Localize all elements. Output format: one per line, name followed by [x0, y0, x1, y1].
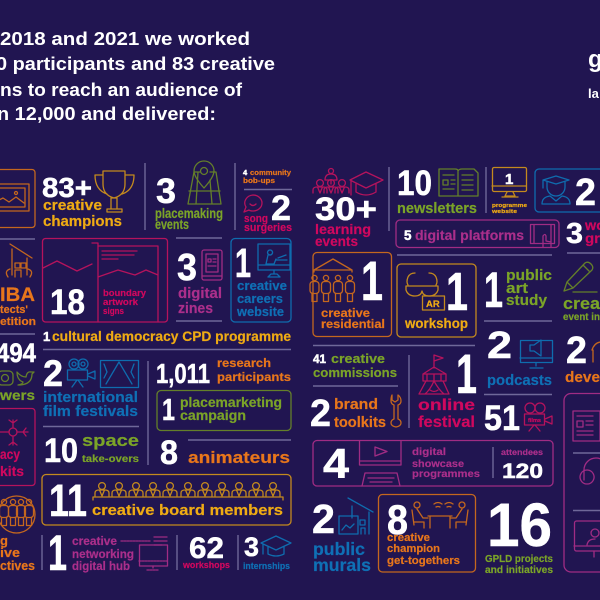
- panel: creative board members: 11: [49, 475, 87, 526]
- RIBA architects competition: [0, 285, 36, 328]
- panel: creative champion get-togethers: 8: [387, 496, 408, 543]
- panel: AR workshop: 1: [446, 262, 468, 322]
- animateurs: [160, 434, 290, 472]
- creative collectives: g: [0, 533, 8, 548]
- panel: creative board members: [42, 474, 291, 526]
- brand toolkits: [310, 393, 401, 435]
- song surgeries: 2: [271, 189, 291, 228]
- panel: digital platforms: [396, 220, 559, 248]
- creative networking digital hub: networking: [72, 547, 134, 561]
- panel: placemarketing campaign: placemarketing: [180, 395, 282, 410]
- international film festivals: 2: [43, 353, 63, 394]
- panel: creative residential: 1: [361, 249, 383, 312]
- panel: digital showcase programmes: [313, 440, 553, 487]
- newsletters: [397, 164, 478, 217]
- public art study: public: [506, 268, 552, 284]
- title: intro statement: n 12,000 and delivered:: [0, 103, 216, 124]
- song surgeries: [244, 189, 292, 234]
- panel: creative careers website: careers: [237, 291, 283, 306]
- title: intro statement: ns to reach an audience of: [0, 79, 243, 100]
- international film festivals: film festivals: [43, 403, 138, 420]
- title: intro statement: 2018 and 2021 we worked: [0, 28, 250, 49]
- placemaking events: 3: [156, 172, 176, 211]
- panel: graduate: 2: [575, 172, 596, 214]
- GPLD projects and initiatives: GPLD projects: [485, 553, 553, 565]
- creative commissions: [313, 352, 397, 380]
- panel: democracy toolkits: acy: [0, 446, 20, 462]
- cultural democracy CPD programme: cultural democracy CPD programme: [52, 329, 291, 344]
- panel: digital showcase programmes: attendees: [501, 447, 543, 457]
- icon: house: [6, 244, 32, 277]
- podcasts: 2: [487, 325, 512, 367]
- creative networking digital hub: 1: [48, 525, 67, 581]
- digital zines: 3: [177, 247, 197, 289]
- community bob-ups: bob-ups: [243, 176, 275, 185]
- panel: creative residential: creative: [321, 306, 370, 320]
- GPLD projects and initiatives: and initiatives: [485, 564, 553, 576]
- online festival: festival: [418, 414, 475, 431]
- panel: creative careers website: creative: [237, 278, 287, 293]
- public murals: [312, 496, 373, 575]
- RIBA architects competition: etition: [0, 316, 36, 328]
- creative event: event in: [563, 312, 600, 323]
- creative champions: champions: [43, 213, 122, 230]
- international film festivals: [43, 353, 138, 420]
- internships: [243, 532, 291, 571]
- animateurs: 8: [160, 434, 178, 472]
- panel: right resources: [564, 394, 600, 572]
- community bob-ups: [243, 168, 292, 185]
- creative event: crea: [563, 295, 600, 313]
- panel: boundary artwork signs: signs: [103, 306, 124, 317]
- placemaking events: events: [155, 217, 189, 232]
- workshops: 62: [189, 532, 224, 565]
- song surgeries: surgeries: [244, 222, 292, 234]
- space take-overs: take-overs: [82, 454, 139, 465]
- online festival: online: [418, 397, 475, 414]
- public murals: murals: [313, 555, 371, 575]
- public art study: [484, 262, 552, 318]
- panel: placemarketing campaign: [157, 390, 291, 430]
- RIBA architects competition: IBA: [0, 285, 35, 306]
- panel: picture icon box: [0, 170, 35, 228]
- workshop groups: [566, 217, 600, 250]
- learning events: [313, 168, 383, 249]
- panel: digital showcase programmes: programmes: [412, 468, 480, 480]
- online festival: 1: [456, 342, 477, 405]
- brand toolkits: toolkits: [334, 414, 386, 431]
- space take-overs: [44, 432, 139, 470]
- public art study: 1: [484, 262, 503, 318]
- panel: creative champion get-togethers: get-togethers: [387, 555, 460, 567]
- public murals: public: [313, 539, 365, 559]
- cultural democracy CPD programme: 1: [43, 329, 50, 344]
- learning events: learning: [315, 221, 371, 237]
- workshops: [182, 532, 230, 571]
- panel: digital showcase programmes: digital: [412, 446, 446, 458]
- developers: [565, 330, 600, 386]
- animateurs: animateurs: [188, 449, 290, 467]
- social followers: wers: [0, 388, 35, 403]
- creative networking digital hub: [48, 525, 168, 581]
- developers: 2: [566, 330, 587, 372]
- learning events: events: [315, 233, 358, 249]
- panel: boundary artwork signs: boundary: [103, 288, 147, 299]
- creative networking digital hub: creative: [72, 534, 117, 548]
- panel: creative residential: [310, 249, 392, 336]
- panel: digital showcase programmes: 4: [323, 440, 350, 487]
- digital zines: [177, 247, 222, 317]
- panel: creative residential: residential: [321, 317, 385, 331]
- panel: creative careers website: [231, 238, 291, 322]
- public art study: art: [506, 281, 528, 297]
- brand toolkits: 2: [310, 393, 331, 435]
- panel: creative careers website: 1: [235, 240, 251, 286]
- workshop groups: gr: [585, 230, 600, 246]
- creative collectives: ive: [0, 545, 20, 560]
- online festival: [418, 342, 477, 431]
- newsletters: newsletters: [397, 201, 477, 217]
- podcasts: podcasts: [487, 372, 552, 389]
- creative commissions: creative: [331, 352, 385, 366]
- programme website: website: [491, 209, 518, 215]
- community bob-ups: community: [250, 168, 292, 177]
- creative collectives: [0, 533, 35, 573]
- creative collectives: ctives: [0, 558, 35, 573]
- learning events: 30+: [315, 191, 377, 227]
- panel: creative careers website: website: [236, 304, 284, 319]
- podcasts: [487, 325, 552, 389]
- placemaking events: [155, 172, 223, 232]
- panel: creative champion get-togethers: champion: [387, 543, 440, 555]
- internships: 3: [244, 532, 259, 562]
- international film festivals: international: [43, 389, 138, 406]
- GPLD projects and initiatives: 16: [487, 491, 552, 559]
- digital zines: digital: [178, 286, 222, 302]
- panel: boundary artwork signs: [42, 238, 168, 322]
- public art study: study: [506, 293, 547, 309]
- community bob-ups: 4: [243, 168, 248, 177]
- panel: digital showcase programmes: showcase: [412, 458, 464, 470]
- workshop groups: 3: [566, 218, 583, 250]
- creative champions: 83+: [42, 172, 92, 203]
- brand toolkits: brand: [334, 396, 378, 413]
- developers: deve: [565, 369, 600, 386]
- logo fragment: la: [588, 86, 600, 101]
- creative event: [563, 262, 600, 323]
- panel: digital showcase programmes: 120: [502, 460, 543, 483]
- title: intro statement: [0, 28, 275, 124]
- creative champions: creative: [43, 197, 102, 214]
- internships: internships: [243, 561, 290, 571]
- logo fragment: [588, 46, 600, 101]
- social followers: [0, 338, 36, 403]
- panel: graduate: [535, 169, 600, 214]
- research participants: participants: [217, 370, 291, 384]
- panel: boundary artwork signs: artwork: [103, 297, 139, 308]
- research participants: research: [217, 356, 271, 370]
- films: films: [528, 418, 541, 424]
- workshops: workshops: [182, 560, 230, 571]
- panel: creative champion get-togethers: creative: [387, 532, 430, 544]
- creative commissions: 41: [313, 354, 327, 366]
- films: 51: [484, 399, 520, 438]
- RIBA architects competition: tects': [0, 304, 28, 316]
- space take-overs: 10: [44, 432, 78, 470]
- programme website: 1: [505, 171, 513, 188]
- creative champions: [42, 172, 122, 230]
- space take-overs: space: [82, 432, 139, 450]
- programme website: [491, 168, 528, 215]
- creative commissions: commissions: [313, 366, 397, 380]
- icon: trophy: [95, 171, 134, 212]
- panel: placemarketing campaign: campaign: [180, 408, 246, 423]
- panel: creative champion get-togethers: [378, 494, 476, 572]
- panel: digital platforms: digital platforms: [415, 227, 524, 243]
- research participants: 1,011: [156, 358, 210, 389]
- digital zines: zines: [178, 301, 213, 317]
- newsletters: 10: [397, 164, 432, 203]
- panel: creative board members: creative board members: [92, 502, 283, 519]
- panel: democracy toolkits: kits: [0, 463, 24, 479]
- public murals: 2: [312, 496, 335, 542]
- title: intro statement: 0 participants and 83 creative: [0, 53, 275, 74]
- research participants: [156, 356, 291, 389]
- films: [484, 399, 552, 438]
- placemaking events: placemaking: [155, 206, 223, 221]
- panel: AR workshop: [397, 262, 476, 337]
- programme website: programme: [492, 203, 528, 209]
- icon: circle of people: [0, 496, 35, 533]
- panel: democracy toolkits: [0, 408, 35, 486]
- panel: boundary artwork signs: 18: [50, 283, 85, 322]
- panel: AR workshop: workshop: [404, 316, 468, 331]
- song surgeries: song: [244, 213, 268, 225]
- panel: placemarketing campaign: 1: [162, 392, 175, 427]
- icon: map pin: [188, 161, 221, 204]
- creative networking digital hub: digital hub: [72, 559, 130, 573]
- panel: digital platforms: 5: [404, 228, 412, 243]
- panel: AR workshop: AR: [426, 299, 440, 310]
